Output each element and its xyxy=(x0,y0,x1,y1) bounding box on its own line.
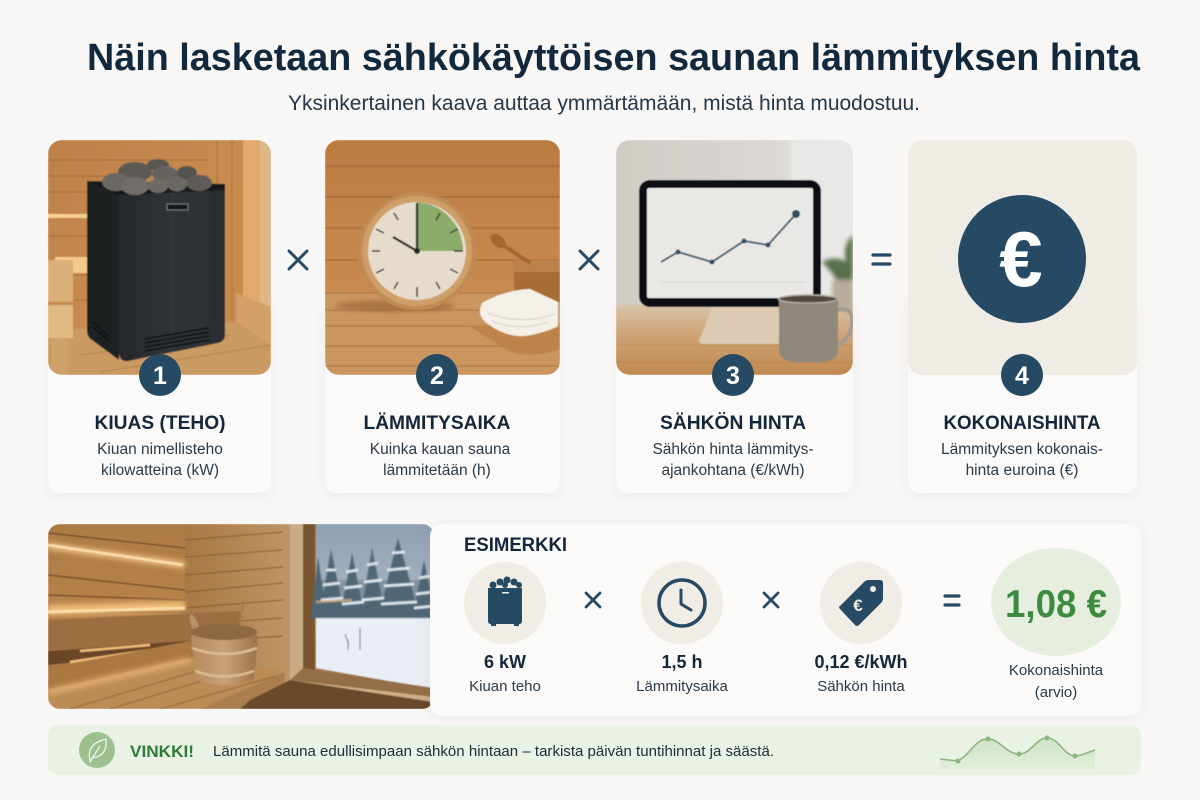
result: 1,08 € xyxy=(991,548,1121,656)
panel background xyxy=(430,524,1141,716)
label: Kokonaishinta (arvio): Kokonaishinta xyxy=(1009,662,1104,679)
label: Kokonaishinta (arvio): (arvio) xyxy=(1035,684,1077,701)
photo: sauna heater xyxy=(48,140,271,375)
tile: euro background xyxy=(908,140,1137,375)
icon: euro coin xyxy=(958,195,1086,323)
description: step 2: lämmitetään (h) xyxy=(383,462,491,479)
panel: step 4 total price xyxy=(908,140,1137,493)
card: step 2 xyxy=(325,300,560,493)
operator: times xyxy=(289,251,307,269)
value: 1,5 h: 1,5 h xyxy=(661,652,703,672)
panel: tip bar xyxy=(48,725,1141,775)
panel: step 3 electricity price xyxy=(616,140,853,493)
icon: price tag in circle: € xyxy=(853,596,863,615)
panel: step 2 clock xyxy=(325,140,560,493)
badge: 4: 4 xyxy=(1015,362,1029,390)
operator: equals xyxy=(873,255,890,264)
photo: price chart on monitor xyxy=(616,140,853,375)
description: step 1: Kiuan nimellisteho xyxy=(97,441,223,458)
operator: equals xyxy=(945,596,959,605)
card: step 4 xyxy=(908,300,1137,493)
badge: 1 xyxy=(139,354,181,396)
description: step 3: ajankohtana (€/kWh) xyxy=(661,462,805,479)
description: step 3: Sähkön hinta lämmitys- xyxy=(652,441,814,458)
operator: times xyxy=(764,593,778,607)
icon: clock in circle xyxy=(641,562,723,644)
badge: 2: 2 xyxy=(430,362,444,390)
description: step 2: Kuinka kauan sauna xyxy=(370,441,511,458)
icon: euro coin: € xyxy=(999,215,1043,303)
photo: sauna interior with winter window xyxy=(48,524,448,709)
title: Näin lasketaan sähkökäyttöisen saunan lämmityksen hinta xyxy=(87,37,1141,79)
description: step 4: hinta euroina (€) xyxy=(966,462,1078,479)
icon: price tag in circle xyxy=(820,562,902,644)
heading: SÄHKÖN HINTA: SÄHKÖN HINTA xyxy=(660,413,806,434)
badge: 3 xyxy=(712,354,754,396)
badge: 3: 3 xyxy=(726,362,740,390)
sparkline xyxy=(940,736,1095,769)
panel: example calculation xyxy=(430,524,1141,716)
label: Lämmitysaika: Lämmitysaika xyxy=(636,678,728,695)
heading: KIUAS (TEHO): KIUAS (TEHO) xyxy=(94,413,226,434)
label: Kiuan teho: Kiuan teho xyxy=(469,678,541,695)
tip text: Lämmitä sauna edullisimpaan sähkön hintaan – tarkista päivän tuntihinnat ja säästä. xyxy=(213,743,774,760)
icon: heater in circle xyxy=(464,562,546,644)
operator: times xyxy=(580,251,598,269)
badge: 2 xyxy=(416,354,458,396)
description: step 1: kilowatteina (kW) xyxy=(101,462,219,479)
badge: 1: 1 xyxy=(153,362,167,390)
icon: leaf xyxy=(79,732,115,768)
photo: wall clock xyxy=(325,140,560,375)
card: step 1 xyxy=(48,300,271,493)
label: VINKKI!: VINKKI! xyxy=(130,742,194,761)
badge: 4 xyxy=(1001,354,1043,396)
heading: ESIMERKKI: ESIMERKKI xyxy=(464,535,567,556)
tip background xyxy=(48,725,1141,775)
heading: KOKONAISHINTA: KOKONAISHINTA xyxy=(944,413,1101,434)
panel: step 1 heater xyxy=(48,140,271,493)
heading: LÄMMITYSAIKA: LÄMMITYSAIKA xyxy=(364,413,511,434)
card: step 3 xyxy=(616,300,853,493)
subtitle: Yksinkertainen kaava auttaa ymmärtämään, mistä hinta muodostuu. xyxy=(288,92,920,115)
label: Sähkön hinta: Sähkön hinta xyxy=(817,678,905,695)
value: 6 kW: 6 kW xyxy=(484,652,526,672)
result: 1,08 €: 1,08 € xyxy=(1005,583,1107,626)
description: step 4: Lämmityksen kokonais- xyxy=(941,441,1103,458)
operator: times xyxy=(586,593,600,607)
value: 0,12 €/kWh: 0,12 €/kWh xyxy=(814,652,908,672)
